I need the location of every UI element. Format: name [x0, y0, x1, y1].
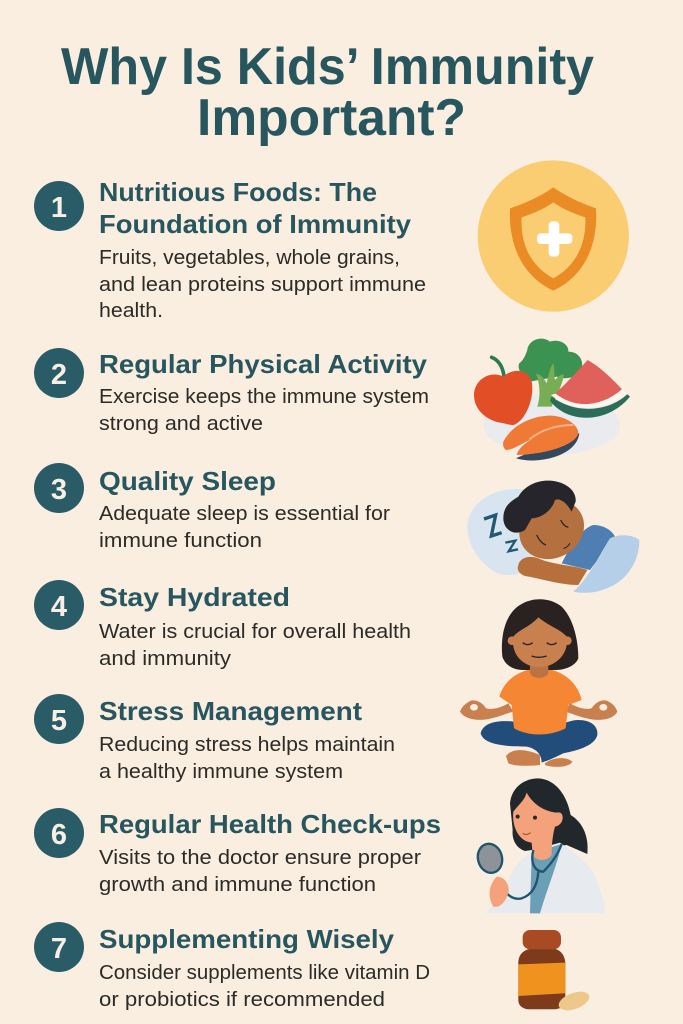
description 6: growth and immune function	[99, 874, 376, 896]
number badge 3: 3	[51, 474, 67, 506]
description 7: or probiotics if recommended	[99, 989, 385, 1011]
number badge 1	[34, 181, 84, 231]
icon: sleeping child	[467, 481, 639, 593]
description 5: Reducing stress helps maintain	[99, 734, 395, 756]
description 2	[99, 386, 429, 435]
number badge 2: 2	[51, 359, 67, 391]
heading 1: Foundation of Immunity	[99, 209, 412, 239]
number badge 6	[34, 808, 84, 858]
title: Important?	[197, 89, 466, 147]
number badge 1: 1	[51, 192, 67, 224]
description 1: health.	[99, 300, 163, 322]
number badge 5: 5	[51, 705, 67, 737]
heading 7: Supplementing Wisely	[99, 924, 395, 954]
heading 1	[99, 177, 412, 239]
item 6: health check-ups	[34, 808, 441, 896]
item 7: supplementing wisely	[34, 922, 430, 1011]
title: Why Is Kids’ Immunity	[61, 38, 594, 96]
number badge 7	[34, 922, 84, 972]
description 6: Visits to the doctor ensure proper	[99, 847, 421, 869]
number badge 5	[34, 694, 84, 744]
description 7: Consider supplements like vitamin D	[99, 962, 430, 984]
item 4: stay hydrated	[34, 580, 411, 670]
icon: meditating child	[460, 599, 617, 767]
description 4: Water is crucial for overall health	[99, 621, 411, 643]
description 4: and immunity	[99, 648, 231, 670]
heading 3: Quality Sleep	[99, 466, 276, 496]
description 3: immune function	[99, 530, 262, 552]
description 1: and lean proteins support immune	[99, 274, 426, 296]
heading 1: Nutritious Foods: The	[99, 177, 377, 207]
heading 6: Regular Health Check-ups	[99, 809, 441, 839]
description 4	[99, 621, 411, 670]
description 2: Exercise keeps the immune system	[99, 386, 429, 408]
number badge 2	[34, 348, 84, 398]
item 2: physical activity	[34, 348, 429, 435]
description 6	[99, 847, 421, 896]
number badge 7: 7	[51, 933, 67, 965]
description 2: strong and active	[99, 413, 263, 435]
description 3	[99, 503, 390, 552]
icon: shield with plus	[478, 160, 629, 312]
heading 4: Stay Hydrated	[99, 582, 290, 612]
description 5	[99, 734, 395, 783]
description 1: Fruits, vegetables, whole grains,	[99, 247, 400, 269]
item 5: stress management	[34, 694, 395, 783]
icon: supplement bottle	[518, 930, 592, 1014]
description 5: a healthy immune system	[99, 761, 343, 783]
description 3: Adequate sleep is essential for	[99, 503, 390, 525]
number badge 6: 6	[51, 819, 67, 851]
number badge 3	[34, 463, 84, 513]
description 7	[99, 962, 430, 1011]
icon: healthy foods	[474, 339, 630, 461]
item 1: nutritious foods	[34, 177, 426, 322]
item 3: quality sleep	[34, 463, 390, 552]
heading 2: Regular Physical Activity	[99, 349, 428, 379]
description 1	[99, 247, 426, 322]
number badge 4	[34, 580, 84, 630]
heading 5: Stress Management	[99, 696, 362, 726]
title	[61, 38, 594, 147]
icon: doctor with magnifier	[475, 778, 605, 913]
number badge 4: 4	[51, 591, 67, 623]
